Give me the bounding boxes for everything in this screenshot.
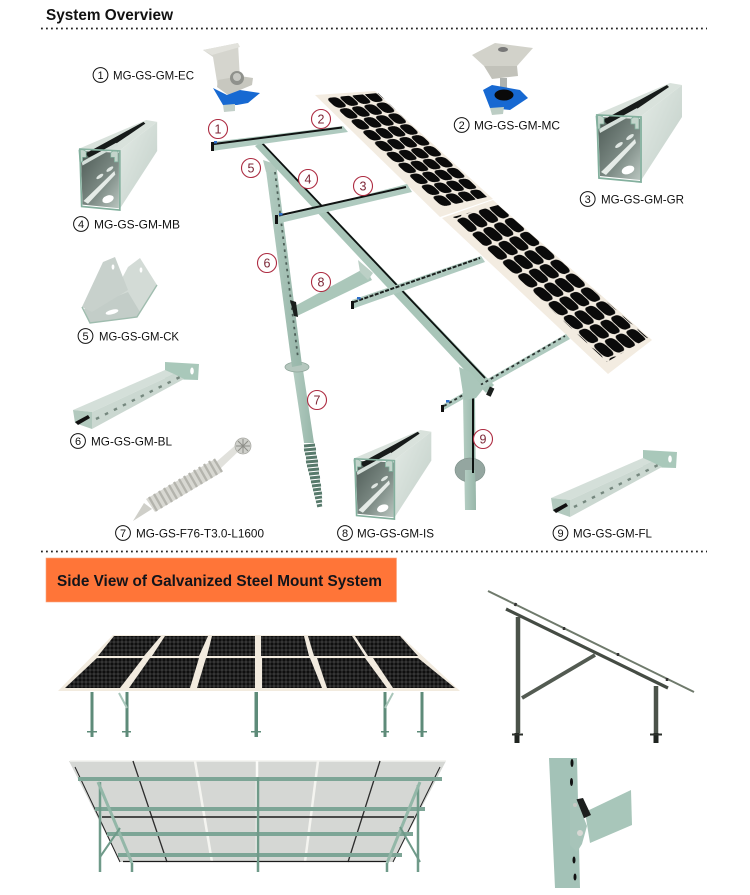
brace [290,260,373,317]
part: inclined strut [353,430,431,519]
red number markers: 4 [305,172,312,186]
label 9: MG-GS-GM-FL [573,526,652,540]
label 5: 5 [82,331,89,343]
array legs [87,692,427,737]
red number markers: 5 [248,162,255,176]
cross rail top [211,126,348,151]
label 7: MG-GS-F76-T3.0-L1600 [136,526,264,540]
cross rail fourth [441,334,570,412]
part: guide rail [595,83,682,182]
label 3: MG-GS-GM-GR [601,192,684,206]
rear post [263,160,302,367]
label 8: 8 [342,528,348,540]
part: main beam [78,120,157,210]
main diagram: mount structure [211,91,652,510]
rear pile [285,362,322,506]
label 2: 2 [459,120,465,132]
part: back leg [73,362,199,429]
cross rail second [275,184,412,224]
label 4: 4 [78,219,84,231]
side view: frame profile [488,591,694,743]
label 1: 1 [97,70,104,82]
red number markers: 1 [215,122,222,136]
solar panel 1 [315,91,493,217]
rear view: array underside [69,761,446,872]
part: ground screw [133,438,251,521]
red number markers: 6 [264,256,271,270]
red number markers: 2 [318,112,325,126]
label 8: MG-GS-GM-IS [357,526,434,540]
posts and braces [98,777,420,872]
part: mid clamp [472,43,533,115]
horizontal rails [78,777,442,857]
part: front leg [551,450,677,517]
part: connection bracket [82,257,157,323]
red number markers: 3 [360,180,367,194]
label 2: MG-GS-GM-MC [474,118,560,132]
label 1: MG-GS-GM-EC [113,68,194,82]
label 5: MG-GS-GM-CK [99,330,179,344]
title: System Overview [46,7,174,24]
back sheets [69,761,446,862]
label 3: 3 [585,194,591,206]
label 9: 9 [557,528,564,540]
small blue clamps [214,141,450,402]
part: end clamp [203,43,260,112]
label 6: 6 [75,436,81,448]
array panels [58,635,460,691]
module dividers [75,761,440,862]
red number markers [208,110,492,448]
front view: solar array [58,635,460,737]
label 7: 7 [120,528,126,540]
heading banner [46,558,396,602]
solar panel 2 [442,200,652,374]
red number markers: 8 [318,276,325,290]
red number markers: 9 [480,432,487,446]
label 4: MG-GS-GM-MB [94,218,180,232]
detail view: bracket joint [549,758,632,888]
label 6: MG-GS-GM-BL [91,434,172,448]
cross rail third [351,256,485,309]
red number markers: 7 [314,394,321,408]
main beam [255,142,494,393]
front post [455,367,494,510]
heading banner: Side View of Galvanized Steel Mount System [57,573,382,590]
